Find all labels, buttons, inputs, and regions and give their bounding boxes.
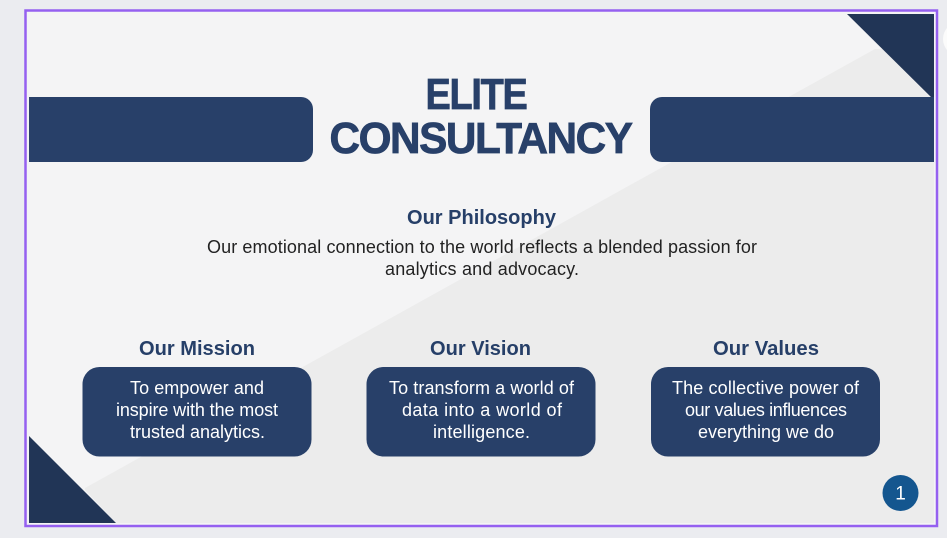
title	[330, 70, 633, 163]
right title bar	[650, 97, 934, 162]
page number badge: 1	[895, 484, 906, 504]
mission text: inspire with the most	[116, 400, 278, 420]
mission text: To empower and	[130, 378, 264, 398]
mission text	[116, 378, 278, 442]
title: ELITE	[426, 70, 527, 119]
mission card	[82, 367, 312, 456]
vision text	[389, 378, 575, 442]
values text: everything we do	[698, 422, 834, 442]
vision text: To transform a world of	[389, 378, 575, 398]
vision card	[366, 367, 596, 456]
heading: our philosophy: Our Philosophy	[407, 207, 557, 229]
philosophy text: analytics and advocacy.	[385, 259, 579, 279]
heading: our values: Our Values	[713, 338, 819, 360]
philosophy text: Our emotional connection to the world reflects a blended passion for	[207, 237, 757, 257]
title: CONSULTANCY	[330, 114, 633, 163]
triangle: top right corner	[847, 14, 934, 100]
mission text: trusted analytics.	[130, 422, 265, 442]
triangle: bottom left corner	[29, 436, 116, 523]
panel: our values	[651, 338, 880, 456]
left title bar	[29, 97, 313, 162]
philosophy text	[207, 237, 757, 279]
edge handle circle	[943, 22, 947, 56]
values text: The collective power of	[672, 378, 860, 398]
panel: our vision	[366, 338, 596, 456]
vision text: intelligence.	[433, 422, 530, 442]
heading: our vision: Our Vision	[430, 338, 531, 360]
vision text: data into a world of	[402, 400, 563, 420]
values text	[672, 378, 860, 442]
values text: our values influences	[685, 400, 847, 420]
values card	[651, 367, 880, 456]
page number badge	[882, 475, 918, 511]
heading: our mission: Our Mission	[139, 338, 255, 360]
panel: our mission	[82, 338, 312, 456]
